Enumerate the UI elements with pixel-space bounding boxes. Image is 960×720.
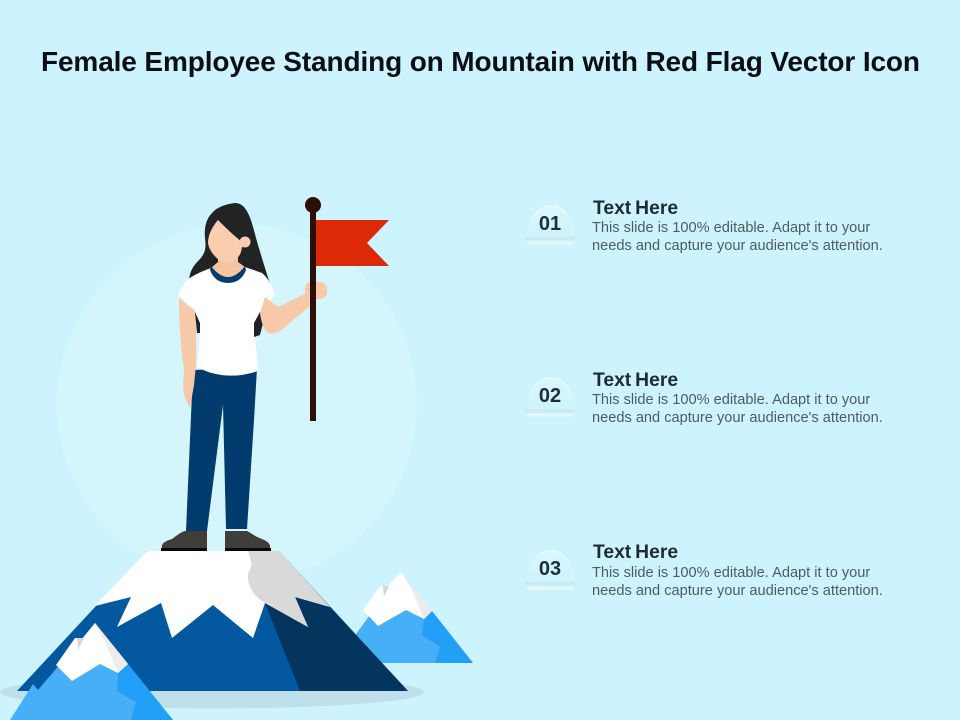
right shoe bbox=[225, 531, 270, 551]
badge 02 bbox=[525, 378, 575, 416]
lower hair bbox=[195, 312, 263, 337]
body text 01: needs and capture your audience's attention. bbox=[592, 238, 883, 254]
collar bbox=[210, 266, 246, 283]
title: Female Employee Standing on Mountain with Red Flag Vector Icon bbox=[41, 46, 920, 77]
heading 01: Text Here bbox=[593, 198, 678, 219]
pants bbox=[186, 368, 257, 531]
figure: woman standing bbox=[161, 203, 327, 551]
hand bbox=[305, 282, 327, 299]
shirt bbox=[178, 267, 275, 376]
item 02 bbox=[525, 370, 883, 426]
icon: red flag bbox=[305, 197, 389, 421]
body text 01: This slide is 100% editable. Adapt it to your bbox=[592, 220, 870, 236]
left shoe bbox=[162, 531, 207, 551]
body text 02: needs and capture your audience's attention. bbox=[592, 410, 883, 426]
background circle bbox=[57, 224, 417, 584]
neck bbox=[211, 254, 245, 277]
icon: right small mountain bbox=[335, 572, 473, 663]
hair bbox=[189, 203, 270, 284]
icon: main mountain bbox=[17, 551, 408, 691]
badge 03 bbox=[525, 551, 575, 590]
body text 03: This slide is 100% editable. Adapt it to your bbox=[592, 565, 870, 581]
right arm bbox=[260, 293, 311, 334]
ground shadow bbox=[0, 676, 424, 708]
badge 01 bbox=[525, 206, 575, 244]
body text 02: This slide is 100% editable. Adapt it to your bbox=[592, 392, 870, 408]
badge 01: 01 bbox=[539, 213, 561, 235]
body text 03: needs and capture your audience's attention. bbox=[592, 583, 883, 599]
left arm bbox=[179, 298, 196, 408]
item 01 bbox=[525, 198, 883, 254]
icon: left small mountain bbox=[10, 623, 173, 720]
heading 02: Text Here bbox=[593, 370, 678, 391]
badge 02: 02 bbox=[539, 385, 561, 407]
badge 03: 03 bbox=[539, 558, 561, 580]
face bbox=[208, 220, 243, 262]
ear bbox=[240, 236, 250, 248]
heading 03: Text Here bbox=[593, 542, 678, 563]
item 03 bbox=[525, 542, 883, 599]
